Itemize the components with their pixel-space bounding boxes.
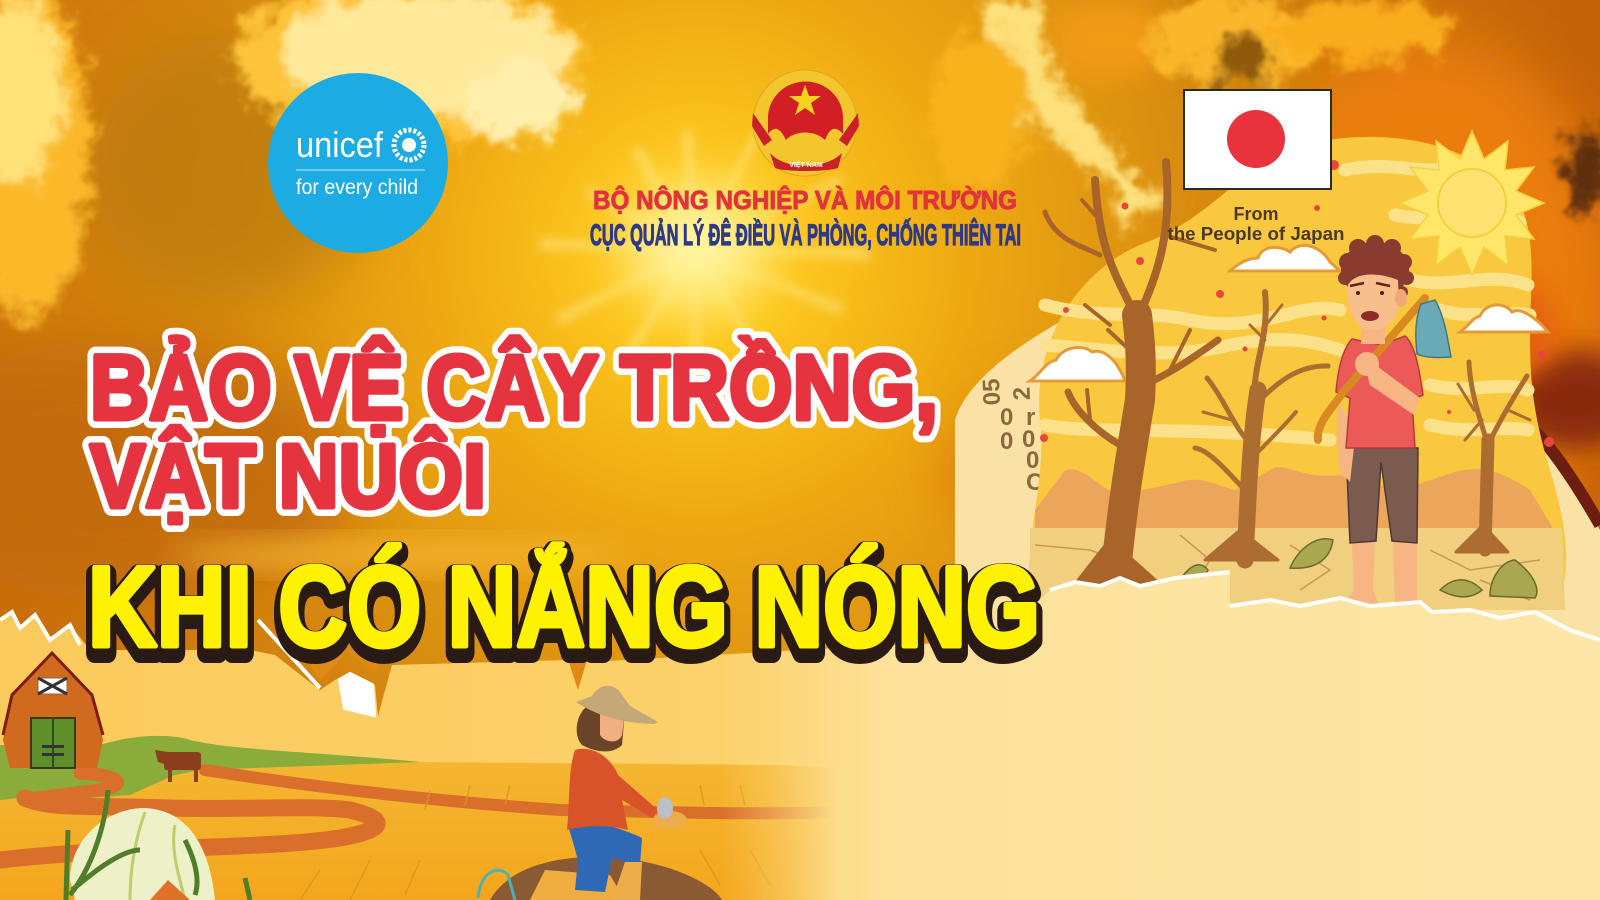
ministry name: CỤC QUẢN LÝ ĐÊ ĐIỀU VÀ PHÒNG, CHỐNG THIÊN TAI (590, 218, 1021, 252)
logo: UNICEF: unicef (296, 124, 384, 165)
mouth (1361, 311, 1379, 321)
field rows (300, 785, 770, 900)
face (600, 705, 625, 741)
book digits: 0 (1000, 428, 1013, 455)
green hill (0, 736, 420, 800)
sky scraps through the tear (258, 620, 374, 715)
red heat dots (1040, 160, 1554, 447)
shorts (1346, 448, 1418, 543)
logo: UNICEF (268, 73, 448, 253)
title: yellow line: KHI CÓ NẮNG NÓNG (88, 544, 1040, 671)
legs (1342, 540, 1380, 607)
book digits: 05 (978, 378, 1006, 406)
wilted plants (1180, 539, 1537, 598)
title: yellow line: KHI CÓ NẮNG NÓNG (88, 551, 1040, 678)
book digits: 2 (1009, 386, 1036, 401)
farm scene: fields, barn, farmer (0, 653, 900, 900)
farmer woman (567, 686, 687, 900)
UNICEF emblem (394, 130, 424, 160)
title: red lines: BẢO VỆ CÂY TRỒNG, (90, 336, 938, 439)
torn paper foreground (0, 572, 1600, 900)
yellow sky blob (1029, 137, 1566, 615)
left arm (1337, 400, 1356, 482)
logo: Vietnam national emblem (752, 70, 859, 176)
cracked ground (1030, 528, 1565, 610)
logo: UNICEF: for every child (296, 176, 418, 199)
hand and seeds (653, 811, 687, 829)
boot (612, 862, 642, 900)
mountains (1035, 467, 1560, 545)
book digits: r (1026, 404, 1035, 431)
basket (478, 870, 515, 900)
dead tree middle (1195, 292, 1328, 560)
title: red lines: VẬT NUÔI (90, 425, 486, 527)
pants (568, 823, 642, 892)
illustration: drought scene (1029, 131, 1566, 615)
dead tree large (1045, 162, 1218, 585)
shirt (567, 749, 658, 830)
title: red lines (90, 336, 938, 527)
dead tree right (1456, 362, 1530, 552)
clouds (0, 0, 1600, 320)
logo: Vietnam national emblem: VIỆT NAM (789, 160, 823, 169)
farmer man (1318, 235, 1451, 607)
neck (1361, 322, 1385, 344)
curly hair (1338, 235, 1414, 298)
face (1348, 275, 1399, 330)
title: red lines: VẬT NUÔI (90, 425, 486, 527)
soil mound (490, 857, 722, 900)
barn (3, 653, 103, 768)
book digits: 0 (1022, 426, 1035, 453)
hoe handle (1318, 298, 1425, 440)
white torn edge (0, 572, 1600, 645)
book digits: C (1026, 469, 1043, 496)
book digits: 0 (1026, 447, 1039, 474)
hair (577, 700, 625, 751)
hat (576, 686, 658, 724)
ministry name (590, 185, 1021, 252)
clouds (1030, 245, 1548, 381)
arm (1362, 355, 1420, 415)
sun (1400, 131, 1544, 275)
cow (155, 750, 201, 782)
open book page behind illustration (955, 322, 1600, 700)
pale stripes (1045, 166, 1530, 440)
winding road (0, 770, 840, 860)
title: red lines: BẢO VỆ CÂY TRỒNG, (90, 336, 938, 439)
logo: Japan flag (1168, 90, 1344, 244)
ministry name: BỘ NÔNG NGHIỆP VÀ MÔI TRƯỜNG (593, 185, 1017, 215)
shirt (1336, 336, 1423, 448)
hoe blade (1416, 300, 1451, 358)
logo: Japan flag: From (1234, 204, 1278, 224)
logo: Japan flag: the People of Japan (1168, 224, 1344, 244)
book digits: 0 (1000, 404, 1013, 431)
golden field with soft fade (0, 762, 900, 900)
book digits (978, 378, 1043, 496)
cabbage (66, 790, 250, 900)
